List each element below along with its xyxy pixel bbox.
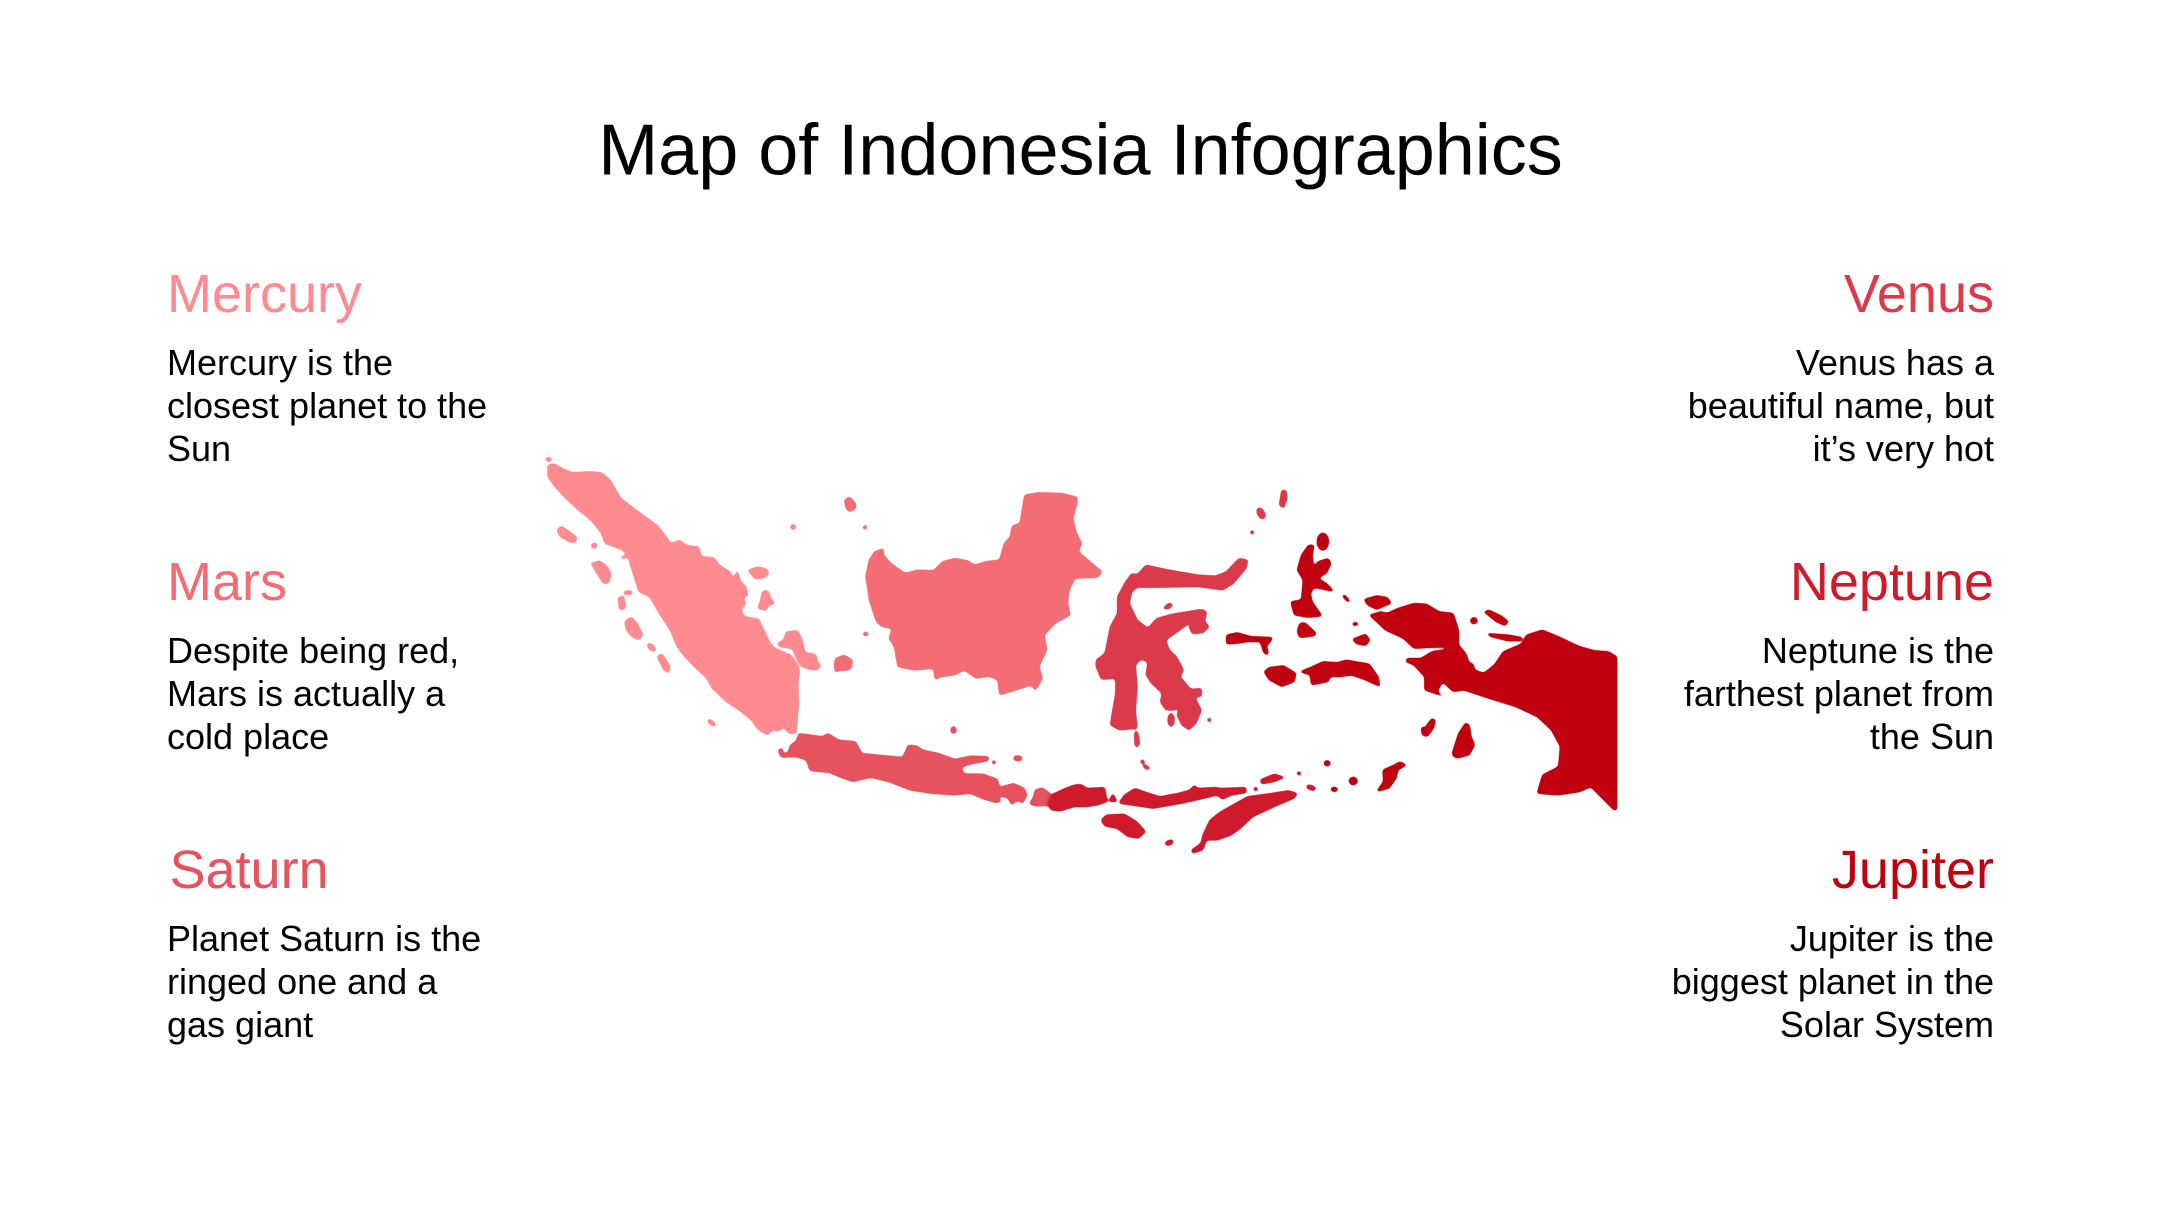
panel: Mercury: Mercury xyxy=(167,264,362,324)
panel: Jupiter: Jupiter is the xyxy=(1790,918,1994,959)
panel: Saturn: Planet Saturn is the xyxy=(167,918,481,959)
panel: Neptune: farthest planet from xyxy=(1684,673,1994,714)
panel: Mars xyxy=(167,552,459,757)
panel: Neptune: Neptune xyxy=(1790,552,1994,612)
panel: Mercury: Mercury is the xyxy=(167,342,393,383)
panel: Jupiter: Solar System xyxy=(1780,1004,1994,1045)
title: Map of Indonesia Infographics xyxy=(598,110,1563,190)
panel: Jupiter xyxy=(1672,840,1994,1045)
panel: Jupiter: biggest planet in the xyxy=(1672,961,1994,1002)
panel: Mars: cold place xyxy=(167,716,329,757)
panel: Saturn: gas giant xyxy=(167,1004,313,1045)
panel: Saturn: Saturn xyxy=(170,840,329,900)
region: Java and Bali xyxy=(778,726,1050,806)
panel: Venus: Venus has a xyxy=(1796,342,1995,383)
panel: Venus: Venus xyxy=(1844,264,1994,324)
panel: Mercury xyxy=(167,264,487,469)
map of Indonesia xyxy=(545,457,1617,853)
panel: Neptune xyxy=(1684,552,1994,757)
panel: Mercury: closest planet to the xyxy=(167,385,487,426)
region: Sulawesi xyxy=(1096,490,1287,770)
panel: Mars: Despite being red, xyxy=(167,630,459,671)
panel: Mercury: Sun xyxy=(167,428,231,469)
region: Maluku and Papua xyxy=(1226,533,1617,810)
region: Lesser Sunda Islands xyxy=(1047,771,1317,853)
panel: Jupiter: Jupiter xyxy=(1832,840,1994,900)
panel: Neptune: the Sun xyxy=(1870,716,1994,757)
panel: Mars: Mars is actually a xyxy=(167,673,446,714)
panel: Saturn xyxy=(167,840,481,1045)
region: Kalimantan xyxy=(834,493,1102,695)
panel: Saturn: ringed one and a xyxy=(167,961,438,1002)
panel: Neptune: Neptune is the xyxy=(1762,630,1994,671)
panel: Venus: it’s very hot xyxy=(1813,428,1994,469)
panel: Venus: beautiful name, but xyxy=(1688,385,1994,426)
panel: Mars: Mars xyxy=(167,552,287,612)
region: Sumatra xyxy=(545,457,821,735)
panel: Venus xyxy=(1688,264,1995,469)
